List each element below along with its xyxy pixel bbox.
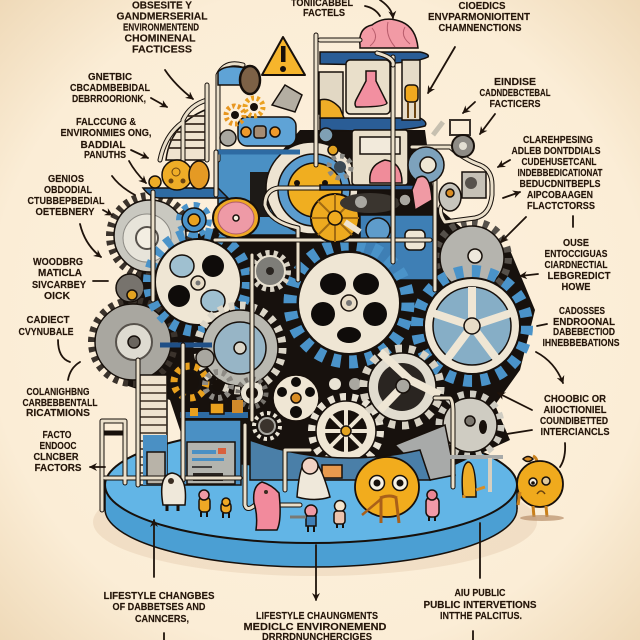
label: cadiect: CADIECT [26, 314, 70, 326]
label: top centre [291, 0, 354, 19]
small film reel [273, 375, 319, 421]
label: factors lower left: FACTORS [34, 462, 82, 474]
upper left blue machine [218, 66, 296, 146]
label: working: MATICLA [38, 267, 82, 279]
label: congenital: RICATMIONS [26, 407, 90, 419]
upper left shelf [143, 152, 300, 300]
label: causes: IHNEBBEBATIONS [542, 337, 620, 349]
label: right long list: FLACTCTORSS [527, 200, 595, 212]
yellow blob on shelf [320, 99, 344, 118]
brain in orange frame [213, 198, 259, 238]
label: top left factors: ENVIRONMENTEND [123, 22, 199, 34]
label: lifestyle changes bottom left: LIFESTYLE CHANGBES [104, 590, 214, 602]
label: top left factors: GANDMERSERIAL [116, 10, 208, 22]
orange gears top [220, 85, 302, 146]
platform [105, 427, 517, 567]
label: genetic: DEBRROORIONK, [72, 93, 146, 105]
upper left stairs and rails [160, 64, 243, 165]
curved pipes centre [215, 188, 430, 420]
label: factors lower left: ENDOOC [40, 440, 77, 452]
gear centre left [198, 306, 282, 390]
grey gear upper left [110, 196, 190, 276]
label: house: CIARDNECTIAL [544, 259, 608, 271]
label: working [32, 256, 86, 302]
label: lifestyle changes bottom centre: LIFESTYLE CHAUNGMENTS [256, 610, 378, 622]
label: engine factors: FACTICERS [490, 98, 540, 110]
chain machinery [340, 193, 411, 213]
small top right machine [433, 120, 474, 157]
label: public interventions: PUBLIC INTERVETIONS [424, 599, 536, 611]
lower railing [102, 345, 310, 510]
label: chronic: CHOOBIC OR [544, 393, 606, 405]
grey gear right [436, 222, 508, 294]
cream cabinet [352, 130, 408, 185]
label: house [544, 237, 611, 293]
label: working: OICK [44, 290, 70, 302]
label: top left factors [116, 0, 208, 56]
label: right long list: CLAREHPESING [523, 134, 593, 146]
label: genes: GENIOS [48, 173, 84, 185]
character: sad yellow fruit [517, 456, 564, 521]
label: top centre: FACTELS [303, 7, 345, 19]
label: falling and environments [60, 116, 152, 161]
blue machine block [218, 150, 435, 280]
label: genes: CTUBBEPBEDIAL [28, 195, 105, 207]
orange gear lower left [174, 349, 231, 398]
label: genetic: CBCADMBEBIDAL [70, 82, 151, 94]
label: lifestyle changes bottom centre [244, 610, 387, 640]
label: right long list: ADLEB DONTDDIALS [512, 145, 600, 157]
label: right long list [512, 134, 603, 212]
lower shelf [160, 345, 248, 485]
label: public interventions: INTTHE PALCITUS. [440, 610, 522, 622]
label: working: SIVCARBEY [32, 279, 86, 291]
label: house: ENTOCCIGUAS [544, 248, 608, 260]
label: right long list: CUDEHUSETCANL [522, 156, 597, 168]
large circle machine [266, 142, 358, 234]
right pipe loop [408, 147, 492, 222]
label: engine factors: EINDISE [494, 76, 536, 88]
character: small blue figure [290, 505, 317, 532]
yellow figure in tower [405, 85, 418, 118]
lower left stairs [140, 375, 167, 485]
small orange sign [322, 465, 342, 478]
character: penguin [297, 458, 330, 500]
label: lifestyle changes bottom centre: MEDICLC ENVIRONEMEND [244, 621, 387, 633]
label: house: OUSE [563, 237, 589, 249]
label: causes: CADOSSES [559, 305, 605, 317]
small mechanism left [116, 274, 144, 302]
label: chronic: COUNDIBETTED [540, 415, 608, 427]
label: house: LEBGREDICT [548, 270, 611, 282]
gear lever right [364, 349, 440, 425]
small gears centre [238, 378, 361, 439]
right bench and pipe [430, 398, 503, 492]
label: working: WOODBRG [33, 256, 83, 268]
film reel gear right [417, 271, 527, 381]
right tower shelves [320, 52, 428, 190]
label: congenital: CARBEBBENTALL [22, 397, 98, 409]
label: top right genetics: ENVPARMONIOITENT [428, 11, 531, 23]
yellow blobs [149, 160, 209, 190]
label: causes: DABEBECTIOD [553, 326, 615, 338]
label: right long list: INDEBBEDICATIONAT [518, 167, 603, 179]
label: falling and environments: FALCCUNG & [76, 116, 136, 128]
label: chronic [540, 393, 610, 438]
label: lifestyle changes bottom left: CANNCERS, [135, 613, 189, 625]
label: engine factors [480, 76, 551, 110]
gear bottom centre [312, 397, 380, 465]
label: genes [28, 173, 105, 218]
label: chronic: INTERCIANCLS [540, 426, 610, 438]
label: top right genetics: CHAMNENCTIONS [438, 22, 522, 34]
grey gear lower left [92, 301, 174, 383]
blue dome base [250, 440, 430, 480]
label: public interventions [424, 587, 536, 622]
label: falling and environments: PANUTHS [84, 149, 126, 161]
label: falling and environments: ENVIRONMIES ONG, [60, 127, 152, 139]
label: factors lower left: FACTO [42, 429, 72, 441]
label: causes: ENDROONAL [553, 316, 616, 328]
top brain [360, 19, 418, 48]
label: public interventions: AIU PUBLIC [454, 587, 506, 599]
small blue gear [179, 205, 209, 235]
gears beside cabinet [319, 128, 351, 178]
main tall pipes [316, 35, 435, 290]
film reel gear centre [290, 244, 408, 362]
label: engine factors: CADNDEBCTEBAL [480, 87, 551, 99]
label: top right genetics [428, 0, 531, 34]
label: right long list: BEDUCDNITBEPLS [520, 178, 600, 190]
label: genetic: GNETBIC [88, 71, 132, 83]
label: top left factors: CHOMINENAL [124, 32, 196, 44]
label: cadiect [18, 314, 74, 338]
label: congenital: COLANIGHBNG [26, 386, 90, 398]
label: congenital [22, 386, 98, 419]
label: top right genetics: CIOEDICS [458, 0, 506, 12]
label: top left factors: FACTICESS [132, 44, 192, 56]
label: causes [542, 305, 620, 349]
character: white blob [162, 473, 185, 511]
film reel gear left [149, 233, 247, 331]
character: small yellow figures [199, 490, 231, 518]
control panel [187, 442, 235, 484]
label: right long list: AIPCOBAAGEN [527, 189, 593, 201]
label: house: HOWE [562, 281, 590, 293]
dark machine backdrop [120, 130, 535, 470]
label: factors lower left: CLNCBER [34, 451, 79, 463]
yellow gear [311, 194, 360, 242]
small gear top centre [252, 253, 288, 289]
label: genes: OBDODIAL [44, 184, 92, 196]
label: falling and environments: BADDIAL [80, 139, 126, 151]
character: pink blob [254, 482, 280, 530]
character: small beige figure [334, 500, 346, 528]
flask box [319, 60, 390, 114]
character: small pink figure [426, 490, 439, 521]
label: cadiect: CVYNUBALE [18, 326, 74, 338]
character: big yellow emoji [355, 457, 419, 523]
label: chronic: AIIOCTIONIEL [544, 404, 607, 416]
warning triangle [262, 37, 305, 75]
label: genetic [70, 71, 151, 105]
label: factors lower left [34, 429, 82, 474]
label: lifestyle changes bottom left: OF DABBETSES AND [112, 601, 206, 613]
character: yellow slim figure [462, 462, 485, 498]
grey gear lower right [395, 394, 501, 480]
label: genes: OETEBNERY [36, 206, 94, 218]
label: lifestyle changes bottom left [104, 590, 214, 625]
